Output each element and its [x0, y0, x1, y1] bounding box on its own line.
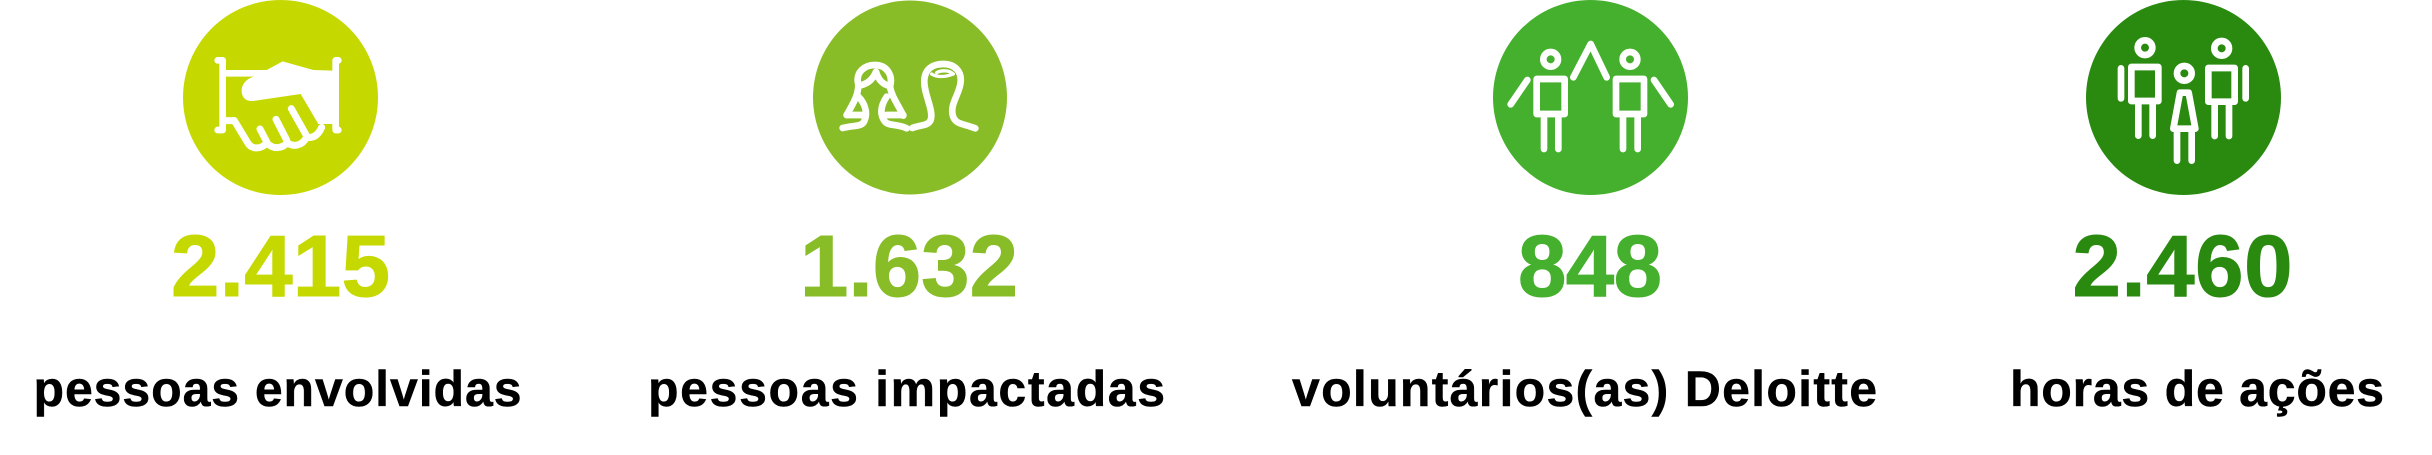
panel: pessoas envolvidas: [34, 0, 522, 417]
label: pessoas envolvidas: pessoas envolvidas: [34, 361, 522, 417]
panel: horas de ações: [2010, 0, 2384, 417]
panel: voluntários(as) Deloitte: [1292, 0, 1877, 417]
label: pessoas impactadas: pessoas impactadas: [648, 361, 1165, 417]
icon: three people in dark green circle: [2086, 0, 2281, 195]
number: 848: 848: [1518, 218, 1662, 315]
number: 2.415: 2.415: [171, 218, 390, 315]
icon: two heads in green circle: [813, 0, 1007, 194]
icon: two people high-five in green circle: [1493, 0, 1688, 195]
number: 1.632: 1.632: [800, 218, 1018, 315]
panel: pessoas impactadas: [648, 0, 1165, 417]
label: voluntários(as) Deloitte: voluntários(as) Deloitte: [1292, 361, 1877, 417]
number: 2.460: 2.460: [2072, 218, 2292, 315]
label: horas de ações: horas de ações: [2010, 361, 2384, 417]
icon: handshake in lime circle: [183, 0, 378, 195]
